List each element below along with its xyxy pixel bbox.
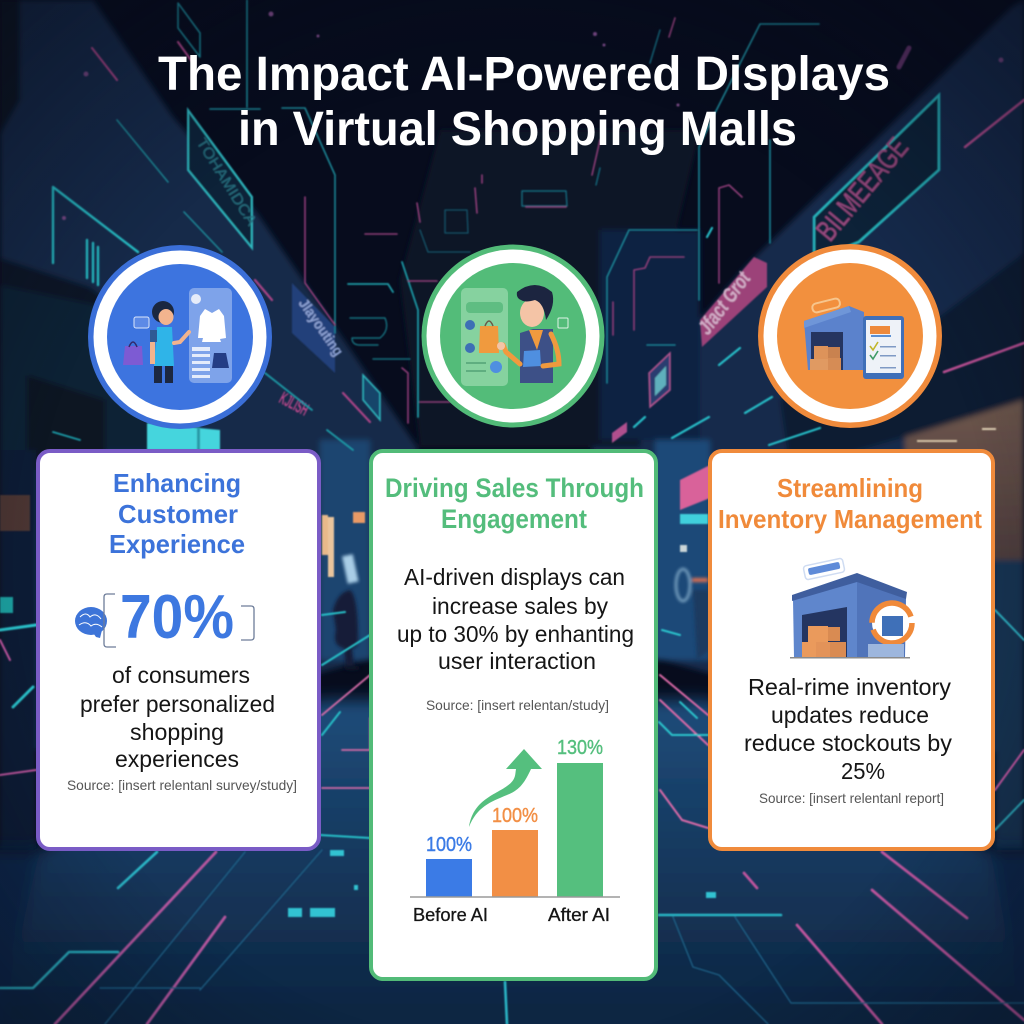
heading: streamlining inventory bbox=[718, 473, 982, 534]
title bbox=[158, 48, 890, 156]
text: sales increase bbox=[397, 564, 634, 674]
title: The Impact AI-Powered Displays bbox=[158, 48, 890, 101]
text: consumer preference bbox=[80, 662, 275, 772]
text: consumer preference: shopping bbox=[130, 719, 224, 745]
bar chart: before and after AI: 100% bbox=[426, 834, 472, 856]
text: consumer preference: of consumers bbox=[112, 662, 250, 688]
arrow: growth bbox=[469, 749, 542, 827]
bar chart: before and after AI: 130% bbox=[557, 737, 603, 759]
heading: enhancing customer experience: Customer bbox=[118, 499, 238, 529]
source note: Source: [insert relentanl survey/study] bbox=[67, 777, 297, 793]
storefront signs bbox=[0, 95, 996, 613]
panel: enhancing customer experience bbox=[38, 451, 319, 849]
bar chart: before and after AI: After AI bbox=[548, 905, 610, 925]
heading: streamlining inventory: Inventory Management bbox=[718, 504, 982, 534]
corridor floor bbox=[0, 700, 1024, 1024]
statistic: 70 percent: 70% bbox=[120, 583, 234, 652]
panel: streamlining inventory management bbox=[710, 451, 993, 849]
heading: driving sales: Engagement bbox=[441, 504, 587, 534]
icon: brain bbox=[75, 607, 107, 638]
text: inventory updates: updates reduce bbox=[771, 702, 929, 728]
storefront signs: TOHAMIDCA bbox=[193, 135, 260, 229]
text: inventory updates: Real-rime inventory bbox=[748, 674, 951, 700]
bar chart: before and after AI: 100% bbox=[492, 805, 538, 827]
heading: driving sales: Driving Sales Through bbox=[385, 473, 644, 503]
text: consumer preference: experiences bbox=[115, 746, 239, 772]
storefront signs: Jlayouting bbox=[295, 296, 347, 359]
storefront signs: KJLISH bbox=[276, 388, 312, 420]
floor light patches bbox=[288, 850, 716, 917]
icon: warehouse with sync arrows bbox=[790, 558, 912, 658]
text: sales increase: AI-driven displays can bbox=[404, 564, 625, 590]
distant light specks bbox=[62, 12, 1004, 220]
icon badge: personalized shopping bbox=[88, 245, 272, 429]
text: sales increase: up to 30% by enhanting bbox=[397, 621, 634, 647]
heading: driving sales bbox=[385, 473, 644, 534]
text: sales increase: user interaction bbox=[438, 648, 596, 674]
panel: driving sales through engagement bbox=[371, 451, 656, 979]
text: inventory updates: reduce stockouts by bbox=[744, 730, 952, 756]
text: inventory updates bbox=[744, 674, 952, 784]
text: inventory updates: 25% bbox=[841, 758, 885, 784]
bar chart: before and after AI bbox=[410, 737, 620, 925]
heading: enhancing customer experience: Experience bbox=[109, 529, 245, 559]
heading: streamlining inventory: Streamlining bbox=[777, 473, 923, 503]
heading: enhancing customer experience: Enhancing bbox=[113, 468, 241, 498]
text: consumer preference: prefer personalized bbox=[80, 691, 275, 717]
source note: Source: [insert relentanl report] bbox=[759, 790, 944, 806]
source note: Source: [insert relentan/study] bbox=[426, 697, 609, 713]
text: sales increase: increase sales by bbox=[432, 593, 608, 619]
icon badge: sales engagement bbox=[422, 244, 604, 428]
figures in corridor bbox=[333, 554, 710, 670]
icon badge: inventory bbox=[758, 244, 942, 428]
heading: enhancing customer experience bbox=[109, 468, 245, 559]
storefront signs: Jfact Grot bbox=[694, 267, 756, 339]
bar chart: before and after AI: Before AI bbox=[413, 905, 488, 925]
storefront signs: BILMEEAGE bbox=[810, 131, 915, 247]
title: in Virtual Shopping Malls bbox=[238, 103, 797, 156]
